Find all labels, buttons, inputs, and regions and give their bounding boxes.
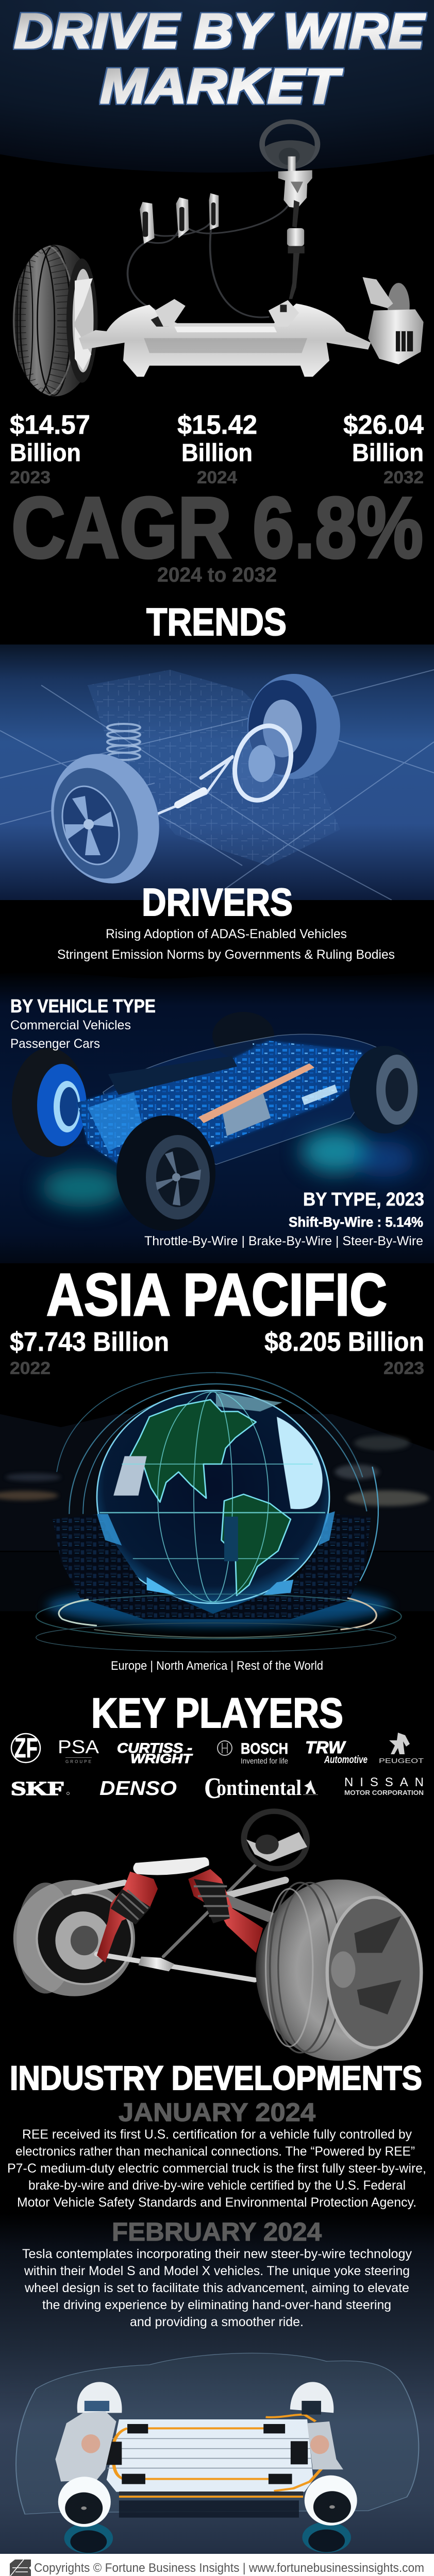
development date: January 2024: JANUARY 2024 — [119, 2098, 315, 2127]
development text: Tesla: the driving experience by eliminating hand-over-hand steering — [42, 2298, 391, 2312]
stat: 2022 regional value: 2022 — [10, 1359, 51, 1378]
logo: Bosch: BOSCH — [241, 1740, 288, 1757]
title — [14, 4, 426, 114]
reflections — [64, 2500, 351, 2554]
development text: Tesla — [22, 2247, 412, 2329]
illustration: steering and suspension — [13, 1801, 421, 2061]
development text: REE: brake-by-wire and drive-by-wire vehicle certified by the U.S. Federal — [28, 2178, 406, 2193]
development text: REE: Motor Vehicle Safety Standards and Environmental Protection Agency. — [17, 2195, 416, 2210]
segment: by vehicle type: Commercial Vehicles — [10, 1018, 131, 1032]
right wheel — [349, 1046, 420, 1133]
globe sphere — [97, 1391, 329, 1603]
stat: 2024 market size: $15.42 — [177, 410, 257, 440]
icon: Fortune Business Insights logo — [10, 2560, 31, 2576]
logo: PSA: GROUPE — [65, 1759, 91, 1764]
upper crossmember — [133, 1857, 209, 1875]
logo: Nissan: NISSAN — [344, 1775, 424, 1789]
logo: SKF — [11, 1778, 69, 1800]
orange cables — [113, 2415, 324, 2497]
copper strip — [198, 1063, 314, 1123]
big wheel — [256, 1879, 421, 2061]
segment: by type: Throttle-By-Wire | Brake-By-Wire | Steer-By-Wire — [144, 1234, 423, 1248]
logo: TRW Automotive: TRW — [305, 1738, 346, 1757]
stat: 2023 market size — [10, 410, 90, 487]
icon: steering wheel — [262, 122, 318, 172]
stat: 2023 market size: 2023 — [10, 468, 51, 487]
logo: Curtiss-Wright: WRIGHT — [130, 1752, 193, 1766]
glass body — [103, 1034, 392, 1164]
cooling rail — [119, 2492, 303, 2495]
heading: trends: TRENDS — [146, 600, 287, 643]
icon: steering wheel — [232, 723, 293, 803]
drivers list — [57, 927, 395, 962]
logo: Denso: DENSO — [99, 1777, 177, 1800]
chassis ghost — [88, 670, 340, 866]
logo: ZF — [11, 1733, 40, 1764]
logo: Nissan — [344, 1775, 424, 1797]
logo: PSA: PSA — [58, 1736, 99, 1757]
logo: TRW Automotive: Automotive — [324, 1754, 368, 1766]
platform rings — [36, 1594, 402, 1652]
rack joint — [138, 1957, 174, 1971]
brake assembly — [362, 277, 424, 364]
heading: asia pacific: ASIA PACIFIC — [46, 1261, 387, 1328]
logo: Continental: C — [204, 1771, 222, 1805]
hero background dome — [0, 0, 434, 173]
rear wheels — [77, 2382, 333, 2413]
stat: 2032 market size: $26.04 — [343, 410, 424, 440]
logo: Continental: ontinental — [216, 1776, 302, 1800]
illustration: EV skateboard platform — [16, 2353, 419, 2554]
stat: 2024 market size — [177, 410, 257, 487]
connectors — [106, 2424, 308, 2484]
meridians — [99, 1392, 325, 1602]
steering column — [278, 170, 312, 299]
stat: 2022 regional value: $7.743 Billion — [10, 1327, 169, 1357]
rear far wheel — [212, 1012, 274, 1059]
segment: by type — [144, 1189, 424, 1248]
heading: key players: KEY PLAYERS — [91, 1690, 343, 1737]
base lighting — [97, 1512, 335, 1596]
logo: PSA — [58, 1736, 99, 1764]
section band: drivers — [0, 900, 434, 967]
tech city base — [53, 1514, 371, 1619]
background gradient: developments and platform — [0, 2213, 434, 2554]
development text: Tesla: within their Model S and Model X vehicles. The unique yoke steering — [24, 2264, 410, 2278]
left shock absorber — [97, 1872, 158, 1963]
stat: 2023 regional value — [264, 1327, 424, 1378]
segment: by vehicle type: Passenger Cars — [10, 1037, 100, 1051]
logo: Continental — [204, 1771, 318, 1805]
stat: 2023 regional value: 2023 — [383, 1359, 424, 1378]
development text: Tesla: and providing a smoother ride. — [130, 2315, 304, 2329]
logo: Curtiss-Wright — [117, 1740, 193, 1766]
steering rods — [75, 1863, 285, 1980]
front wheels — [58, 2476, 357, 2527]
stat: 2024 market size: Billion — [181, 439, 253, 467]
segment: by type: BY TYPE, 2023 — [303, 1189, 424, 1210]
development text: REE: electronics rather than mechanical connections. The “Powered by REE” — [15, 2144, 415, 2159]
glass highlights — [113, 1393, 323, 1509]
logo: Peugeot: PEUGEOT — [379, 1757, 424, 1765]
logo: Peugeot — [379, 1733, 424, 1765]
logo: TRW Automotive — [305, 1738, 368, 1766]
front wheel — [51, 754, 159, 884]
control modules — [140, 193, 219, 244]
logo: Bosch — [218, 1740, 288, 1766]
logo: SKF: SKF — [11, 1778, 64, 1800]
title: DRIVE BY WIRE — [14, 4, 426, 59]
segment: by vehicle type — [10, 995, 156, 1051]
segment: by type: Shift-By-Wire : 5.14% — [289, 1214, 423, 1230]
drivers list: Stringent Emission Norms by Governments & Ruling Bodies — [57, 947, 395, 962]
night horizon — [0, 1414, 434, 1611]
small wheel — [13, 1880, 135, 1996]
segment: by vehicle type: BY VEHICLE TYPE — [10, 995, 156, 1016]
logo: ZF: ZF — [14, 1733, 38, 1764]
stat: 2023 regional value: $8.205 Billion — [264, 1327, 424, 1357]
logo: Bosch: Invented for life — [241, 1757, 288, 1766]
heading: drivers: DRIVERS — [142, 880, 293, 924]
other regions list: Europe | North America | Rest of the World — [111, 1659, 323, 1673]
development text: Tesla: wheel design is set to facilitate this advancement, aiming to elevate — [24, 2281, 409, 2295]
CAGR period: 2024 to 2032 — [157, 564, 277, 586]
icon: steering wheel — [232, 1801, 318, 1878]
stat: 2032 market size — [343, 410, 424, 487]
cables — [128, 206, 288, 317]
left rear wheel — [12, 1048, 87, 1157]
stat: 2032 market size: Billion — [352, 439, 424, 467]
development text: REE — [7, 2127, 426, 2210]
rear wheel — [247, 674, 340, 779]
footer — [0, 2554, 434, 2576]
drivers list: Rising Adoption of ADAS-Enabled Vehicles — [106, 927, 347, 941]
illustration: holographic globe — [0, 1372, 434, 1652]
front wheel — [116, 1115, 215, 1231]
logo: Curtiss-Wright: CURTISS - — [117, 1740, 192, 1756]
stat: 2023 market size: Billion — [10, 439, 81, 467]
right shock absorber — [188, 1869, 263, 1953]
front and rear motor units — [55, 2401, 343, 2482]
stat: 2023 market size: $14.57 — [10, 410, 90, 440]
drivetrain — [77, 1041, 371, 1175]
title: MARKET — [100, 59, 343, 114]
steering rack — [155, 756, 232, 815]
stat: 2022 regional value — [10, 1327, 169, 1378]
icon: tyre — [12, 245, 98, 396]
battery deck — [107, 2419, 313, 2492]
ghost car body — [16, 2353, 419, 2514]
floor glow — [41, 1130, 415, 1207]
development text: REE: REE received its first U.S. certification for a vehicle fully controlled by — [22, 2127, 412, 2142]
outer rings — [57, 1372, 378, 1581]
panel: electric car image — [0, 971, 434, 1263]
platform glow — [47, 1585, 390, 1627]
panel: trends blueprint image — [0, 645, 434, 900]
development text: Tesla: Tesla contemplates incorporating their new steer-by-wire technology — [22, 2247, 412, 2261]
stat: 2032 market size: 2032 — [383, 468, 424, 487]
development text: REE: P7-C medium-duty electric commercial truck is the first fully steer-by-wire, — [7, 2161, 426, 2176]
coil spring — [107, 724, 140, 760]
front subframe — [79, 299, 371, 377]
logo: Nissan: MOTOR CORPORATION — [344, 1789, 424, 1797]
continents — [129, 1400, 291, 1596]
illustration: drive-by-wire chassis — [12, 122, 424, 396]
stat: 2024 market size: 2024 — [197, 468, 237, 487]
development date: February 2024: FEBRUARY 2024 — [112, 2217, 322, 2246]
